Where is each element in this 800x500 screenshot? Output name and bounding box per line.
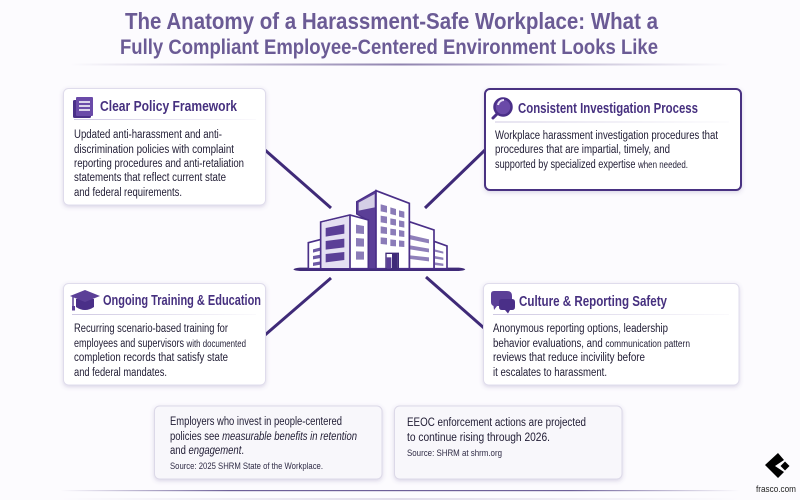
body text: [74, 323, 246, 379]
right wing: [409, 222, 434, 269]
body text: it escalates to harassment.: [493, 367, 607, 379]
title: Fully Compliant Employee-Centered Environment Looks Like: [120, 36, 658, 59]
far right wing: [434, 241, 447, 269]
callout: SHRM retention statistic: and engagement.: [170, 445, 244, 457]
body text: completion records that satisfy state: [74, 352, 228, 364]
title: [120, 8, 658, 59]
body text: Anonymous reporting options, leadership: [493, 323, 668, 335]
body text: procedures that are impartial, timely, and: [495, 144, 670, 156]
ground: [293, 268, 465, 271]
body text: supported by specialized expertise when needed.: [495, 159, 688, 171]
body text: Updated anti-harassment and anti-: [74, 129, 222, 141]
callout: EEOC enforcement statistic: [394, 406, 622, 479]
callout: EEOC enforcement statistic: EEOC enforcement actions are projected: [407, 417, 586, 429]
body text: [493, 323, 690, 379]
body text: and federal requirements.: [74, 187, 182, 199]
panel: consistent investigation process: [485, 89, 741, 190]
icon: magnifying glass: [493, 98, 512, 118]
body text: behavior evaluations, and communication pattern: [493, 338, 690, 350]
body text: [495, 130, 719, 171]
body text: reporting procedures and anti-retaliation: [74, 158, 244, 170]
logo: frasco: frasco.com: [756, 484, 796, 494]
callout: SHRM retention statistic: policies see measurable benefits in retention: [170, 431, 357, 443]
panel: ongoing training and education: [64, 284, 266, 385]
icon: graduation cap: [70, 290, 100, 310]
icon: chat bubbles: [491, 291, 515, 314]
body text: and federal mandates.: [74, 367, 167, 379]
body text: Workplace harassment investigation procedures that: [495, 130, 719, 142]
callout: SHRM retention statistic: Source: 2025 SHRM State of the Workplace.: [170, 461, 323, 472]
panel: culture and reporting safety: [484, 284, 739, 385]
far left wing: [308, 239, 321, 269]
body text: Recurring scenario-based training for: [74, 323, 228, 335]
callout: EEOC enforcement statistic: to continue rising through 2026.: [407, 432, 550, 444]
main tower: [376, 191, 409, 269]
connector lines: [265, 150, 485, 335]
heading: Clear Policy Framework: [100, 99, 238, 115]
icon: policy book: [73, 97, 93, 118]
body text: employees and supervisors with documented: [74, 338, 246, 350]
callout: SHRM retention statistic: Employers who invest in people-centered: [170, 416, 342, 428]
body text: statements that reflect current state: [74, 172, 226, 184]
body text: reviews that reduce incivility before: [493, 352, 645, 364]
heading: Ongoing Training & Education: [103, 293, 261, 309]
title: The Anatomy of a Harassment-Safe Workplace: What a: [125, 8, 658, 34]
icon: central office building: [293, 191, 465, 271]
callout: SHRM retention statistic: [154, 406, 382, 479]
left tower side: [357, 191, 376, 269]
logo: frasco: [756, 453, 796, 494]
panel: clear policy framework: [64, 88, 266, 205]
left building: [321, 215, 368, 269]
heading: Culture & Reporting Safety: [519, 294, 667, 310]
body text: [74, 129, 244, 199]
heading: Consistent Investigation Process: [518, 101, 698, 117]
callout: EEOC enforcement statistic: Source: SHRM at shrm.org: [407, 448, 502, 459]
body text: discrimination policies with complaint: [74, 144, 235, 156]
